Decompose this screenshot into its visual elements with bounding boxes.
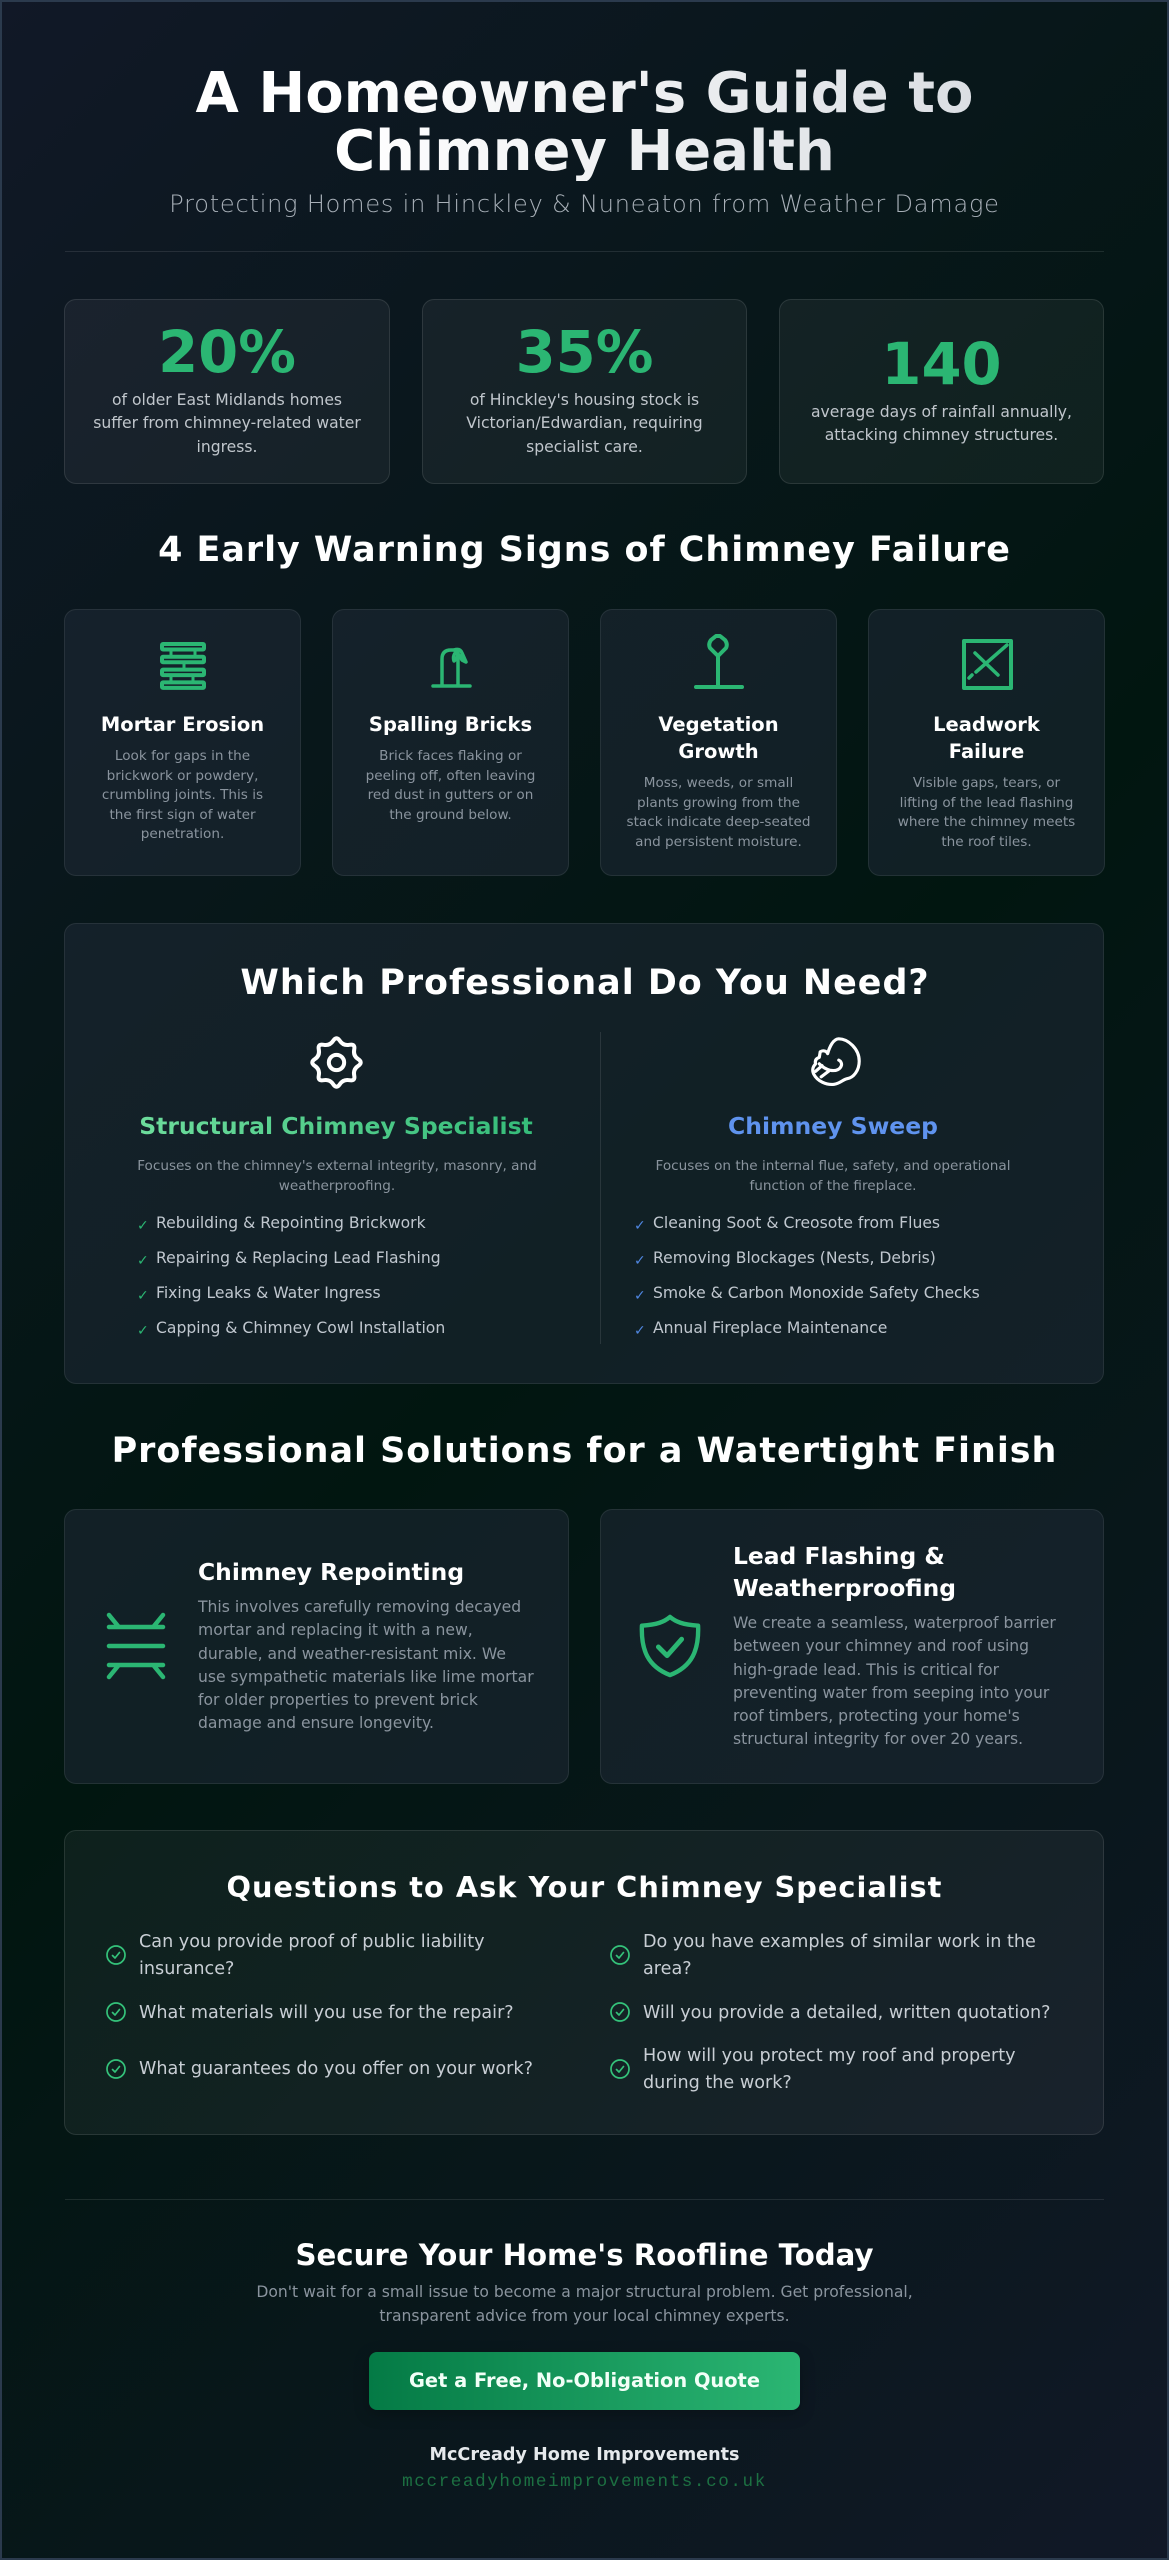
- column: structural chimney specialist: [137, 1036, 537, 1339]
- question text: What materials will you use for the repair?: [139, 2003, 514, 2023]
- solution title: Weatherproofing: [733, 1574, 956, 1602]
- stat card: 20%: [64, 299, 390, 484]
- stat description: ingress.: [196, 438, 257, 456]
- card title: Growth: [678, 740, 759, 763]
- solution text: use sympathetic materials like lime mortar: [198, 1668, 534, 1686]
- solution text: durable, and weather-resistant mix. We: [198, 1645, 506, 1663]
- checklist: ✓: [634, 1253, 646, 1269]
- panel: which professional: [64, 923, 1104, 1384]
- stat description: [93, 391, 361, 456]
- icon: check circle: [610, 2059, 630, 2079]
- column description: Focuses on the chimney's external integrity, masonry, and: [137, 1158, 537, 1174]
- icon: sweep: [811, 1037, 861, 1086]
- column description: [656, 1158, 1010, 1194]
- stat number: 140: [881, 331, 1002, 398]
- card text: the roof tiles.: [941, 834, 1032, 850]
- card text: penetration.: [141, 826, 224, 842]
- icon: check circle: [610, 1945, 630, 1965]
- question text: [643, 1932, 1036, 1979]
- icon: shield check: [640, 1614, 700, 1678]
- panel: questions: [64, 1830, 1104, 2135]
- icon: mortar joints: [106, 1612, 166, 1680]
- question text: Will you provide a detailed, written quotation?: [643, 2003, 1051, 2023]
- card text: Visible gaps, tears, or: [913, 775, 1060, 791]
- item: Cleaning Soot & Creosote from Flues: [653, 1214, 940, 1232]
- icon: check circle: [106, 1945, 126, 1965]
- stat description: of Hinckley's housing stock is: [470, 391, 699, 409]
- stat description: average days of rainfall annually,: [811, 403, 1072, 421]
- question 3: [106, 2059, 533, 2079]
- card text: and persistent moisture.: [635, 834, 802, 850]
- card title: [933, 713, 1040, 763]
- stat description: [466, 391, 703, 456]
- checklist: [137, 1214, 445, 1339]
- icon: gear: [310, 1036, 363, 1089]
- website: mccreadyhomeimprovements.co.uk: [402, 2472, 767, 2492]
- question text: How will you protect my roof and property: [643, 2046, 1016, 2066]
- question text: Can you provide proof of public liability: [139, 1932, 485, 1952]
- column title: Structural Chimney Specialist: [139, 1112, 533, 1140]
- checklist: ✓: [137, 1288, 149, 1304]
- stat number: 35%: [516, 319, 653, 386]
- question 6: [610, 2046, 1016, 2093]
- checklist: ✓: [137, 1323, 149, 1339]
- stat description: suffer from chimney-related water: [93, 414, 361, 432]
- stat card: 140: [779, 299, 1104, 484]
- checklist: [634, 1214, 980, 1339]
- question 1: [106, 1932, 485, 1979]
- item: Repairing & Replacing Lead Flashing: [156, 1249, 441, 1267]
- question text: [139, 1932, 485, 1979]
- call to action heading: Secure Your Home's Roofline Today: [295, 2238, 874, 2272]
- card title: Mortar Erosion: [101, 713, 264, 736]
- solution title: [733, 1542, 956, 1602]
- call to action text: [0, 2280, 1169, 2328]
- question text: area?: [643, 1959, 692, 1979]
- panel heading: Which Professional Do You Need?: [240, 963, 930, 1003]
- subtitle: Protecting Homes in Hinckley & Nuneaton from Weather Damage: [169, 190, 1000, 218]
- icon: plant: [694, 634, 744, 689]
- card text: [102, 748, 263, 842]
- question text: What guarantees do you offer on your work?: [139, 2059, 533, 2079]
- card text: [366, 748, 535, 822]
- question 5: [610, 2002, 1051, 2023]
- stat card: 35%: [422, 299, 747, 484]
- checklist: ✓: [137, 1218, 149, 1234]
- card text: the first sign of water: [109, 806, 256, 822]
- column description: [137, 1158, 537, 1194]
- question text: insurance?: [139, 1959, 234, 1979]
- warning card: leadwork failure: [868, 609, 1105, 876]
- warning card: mortar erosion: [64, 609, 301, 876]
- stat description: [811, 403, 1072, 444]
- card title: Vegetation: [658, 713, 779, 736]
- question 4: [610, 1932, 1036, 1979]
- card text: Brick faces flaking or: [379, 748, 522, 764]
- column description: weatherproofing.: [279, 1178, 395, 1194]
- card text: peeling off, often leaving: [366, 768, 535, 784]
- icon: damaged flashing: [962, 639, 1013, 690]
- solution title: Chimney Repointing: [198, 1558, 464, 1586]
- solution text: for older properties to prevent brick: [198, 1691, 478, 1709]
- item: Annual Fireplace Maintenance: [653, 1319, 887, 1337]
- solution text: This involves carefully removing decayed: [198, 1598, 521, 1616]
- solution text: We create a seamless, waterproof barrier: [733, 1614, 1056, 1632]
- question 2: [106, 2002, 514, 2023]
- card text: crumbling joints. This is: [102, 787, 263, 803]
- item: Rebuilding & Repointing Brickwork: [156, 1214, 426, 1232]
- icon: spalling brick: [431, 648, 472, 688]
- item: Capping & Chimney Cowl Installation: [156, 1319, 445, 1337]
- title: Chimney Health: [334, 119, 835, 184]
- solution text: high-grade lead. This is critical for: [733, 1661, 999, 1679]
- stat number: 20%: [158, 319, 296, 386]
- card text: brickwork or powdery,: [107, 768, 258, 784]
- stat description: Victorian/Edwardian, requiring: [466, 414, 703, 432]
- checklist: ✓: [634, 1218, 646, 1234]
- card title: Spalling Bricks: [369, 713, 532, 736]
- warning card: vegetation growth: [600, 609, 837, 876]
- question text: during the work?: [643, 2073, 792, 2093]
- checklist: ✓: [634, 1288, 646, 1304]
- card title: Failure: [949, 740, 1024, 763]
- icon: check circle: [106, 2059, 126, 2079]
- column description: function of the fireplace.: [749, 1178, 916, 1194]
- icon: brick wall: [160, 642, 206, 690]
- card text: where the chimney meets: [898, 814, 1075, 830]
- heading: solutions: Professional Solutions for a Watertight Finish: [112, 1431, 1057, 1471]
- call to action text: transparent advice from your local chimney experts.: [379, 2307, 790, 2325]
- solution card: repointing: [64, 1509, 569, 1784]
- card text: the ground below.: [389, 806, 512, 822]
- title: [0, 65, 1169, 181]
- solution text: damage and ensure longevity.: [198, 1714, 434, 1732]
- heading: warning signs: 4 Early Warning Signs of Chimney Failure: [158, 530, 1011, 570]
- column title: [65, 1109, 607, 1143]
- call to action text: Don't wait for a small issue to become a major structural problem. Get professional,: [256, 2283, 913, 2301]
- column description: Focuses on the internal flue, safety, and operational: [656, 1158, 1010, 1174]
- company name: McCready Home Improvements: [429, 2445, 740, 2465]
- panel heading: Questions to Ask Your Chimney Specialist: [227, 1870, 942, 1904]
- card text: [898, 775, 1075, 850]
- card text: plants growing from the: [637, 794, 800, 810]
- checklist: ✓: [634, 1323, 646, 1339]
- title: A Homeowner's Guide to: [196, 61, 973, 126]
- card text: lifting of the lead flashing: [900, 794, 1073, 810]
- column: chimney sweep: [634, 1037, 1010, 1339]
- icon: check circle: [610, 2002, 630, 2022]
- item: Smoke & Carbon Monoxide Safety Checks: [653, 1284, 980, 1302]
- solution text: mortar and replacing it with a new,: [198, 1621, 473, 1639]
- card title: [658, 713, 779, 763]
- solution card: lead flashing: [600, 1509, 1104, 1784]
- warning card: spalling bricks: [332, 609, 569, 876]
- question text: Do you have examples of similar work in the: [643, 1932, 1036, 1952]
- checklist: ✓: [137, 1253, 149, 1269]
- stat description: of older East Midlands homes: [112, 391, 342, 409]
- solution text: [733, 1614, 1056, 1748]
- stat description: attacking chimney structures.: [825, 426, 1058, 444]
- button: Get a Free, No-Obligation Quote: [409, 2369, 760, 2392]
- solution title: Lead Flashing &: [733, 1542, 945, 1570]
- stat description: specialist care.: [526, 438, 643, 456]
- solution text: [198, 1598, 534, 1732]
- solution text: between your chimney and roof using: [733, 1637, 1029, 1655]
- card text: Look for gaps in the: [115, 748, 250, 764]
- card text: Moss, weeds, or small: [644, 775, 793, 791]
- solution text: preventing water from seeping into your: [733, 1684, 1049, 1702]
- column title: Chimney Sweep: [728, 1112, 938, 1140]
- icon: check circle: [106, 2002, 126, 2022]
- solution text: structural integrity for over 20 years.: [733, 1730, 1023, 1748]
- solution text: roof timbers, protecting your home's: [733, 1707, 1020, 1725]
- card text: stack indicate deep-seated: [626, 814, 810, 830]
- question text: [643, 2043, 1016, 2097]
- item: Removing Blockages (Nests, Debris): [653, 1249, 936, 1267]
- card text: [626, 775, 810, 850]
- button: [369, 2352, 800, 2410]
- item: Fixing Leaks & Water Ingress: [156, 1284, 381, 1302]
- card text: red dust in gutters or on: [368, 787, 533, 803]
- card title: Leadwork: [933, 713, 1040, 736]
